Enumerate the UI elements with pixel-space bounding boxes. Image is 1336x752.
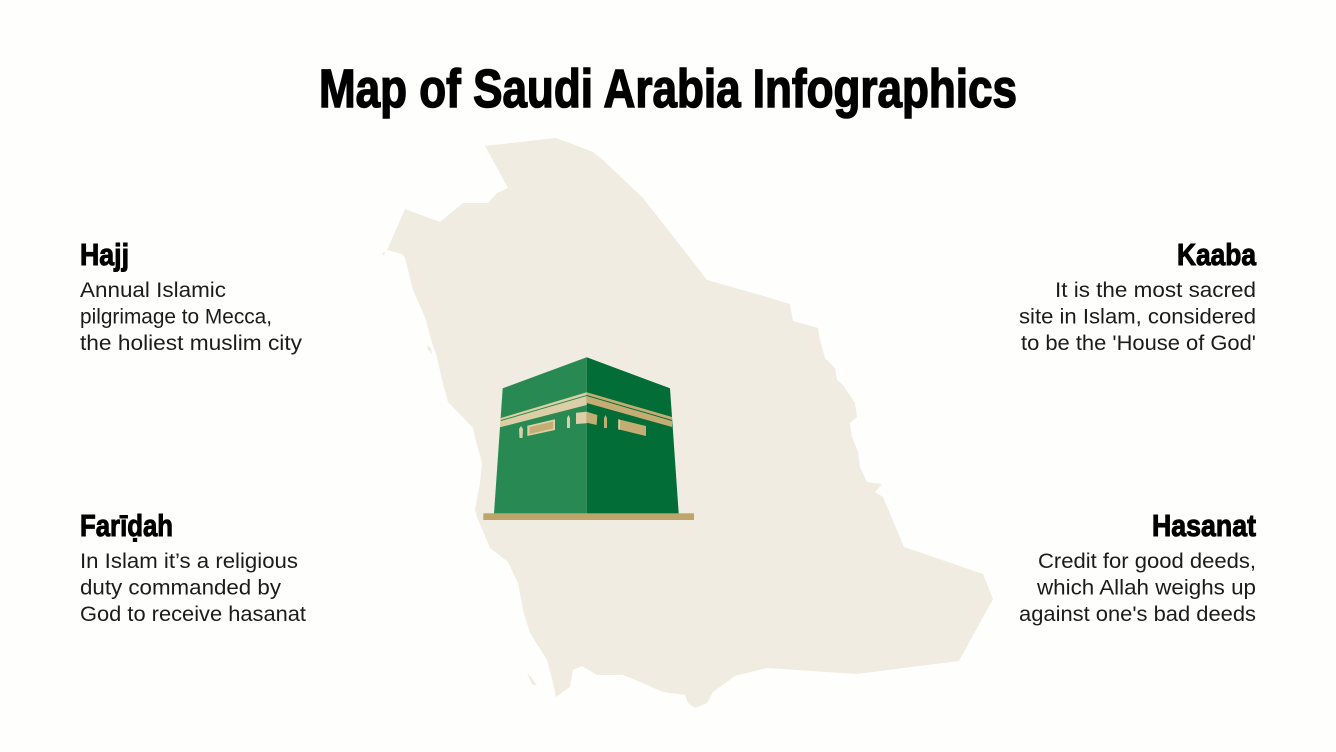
text block: Hajj: pilgrimage to Mecca, [80, 304, 272, 328]
text block: Hajj [80, 237, 302, 355]
icon: Kaaba [483, 357, 694, 520]
text block: Hasanat: which Allah weighs up [1036, 576, 1256, 600]
text block: Hajj: the holiest muslim city [80, 331, 302, 355]
text block: Kaaba: It is the most sacred [1055, 278, 1256, 302]
band windows [519, 412, 646, 438]
text block: Hasanat: Credit for good deeds, [1038, 549, 1256, 573]
gold band [500, 392, 672, 427]
text block: Hasanat: Hasanat [1152, 508, 1256, 543]
text block: Hajj: Hajj [80, 237, 129, 272]
text block: Kaaba: to be the 'House of God' [1021, 331, 1256, 355]
text block: Faridah: Farīḍah [80, 508, 173, 543]
map of Saudi Arabia [382, 138, 993, 708]
Kaaba left face [494, 357, 587, 514]
Kaaba right face [587, 357, 679, 514]
text block: Faridah [80, 508, 306, 626]
text block: Faridah: duty commanded by [80, 576, 281, 600]
title: Map of Saudi Arabia Infographics [319, 59, 1017, 119]
text block: Kaaba: site in Islam, considered [1019, 304, 1256, 328]
text block: Hasanat [1019, 508, 1256, 626]
text block: Hasanat: against one's bad deeds [1019, 602, 1256, 626]
base [483, 513, 694, 520]
text block: Faridah: In Islam it’s a religious [80, 549, 298, 573]
text block: Kaaba: Kaaba [1177, 237, 1257, 272]
text block: Hajj: Annual Islamic [80, 278, 226, 302]
text block: Kaaba [1019, 237, 1257, 355]
text block: Faridah: God to receive hasanat [80, 602, 306, 626]
